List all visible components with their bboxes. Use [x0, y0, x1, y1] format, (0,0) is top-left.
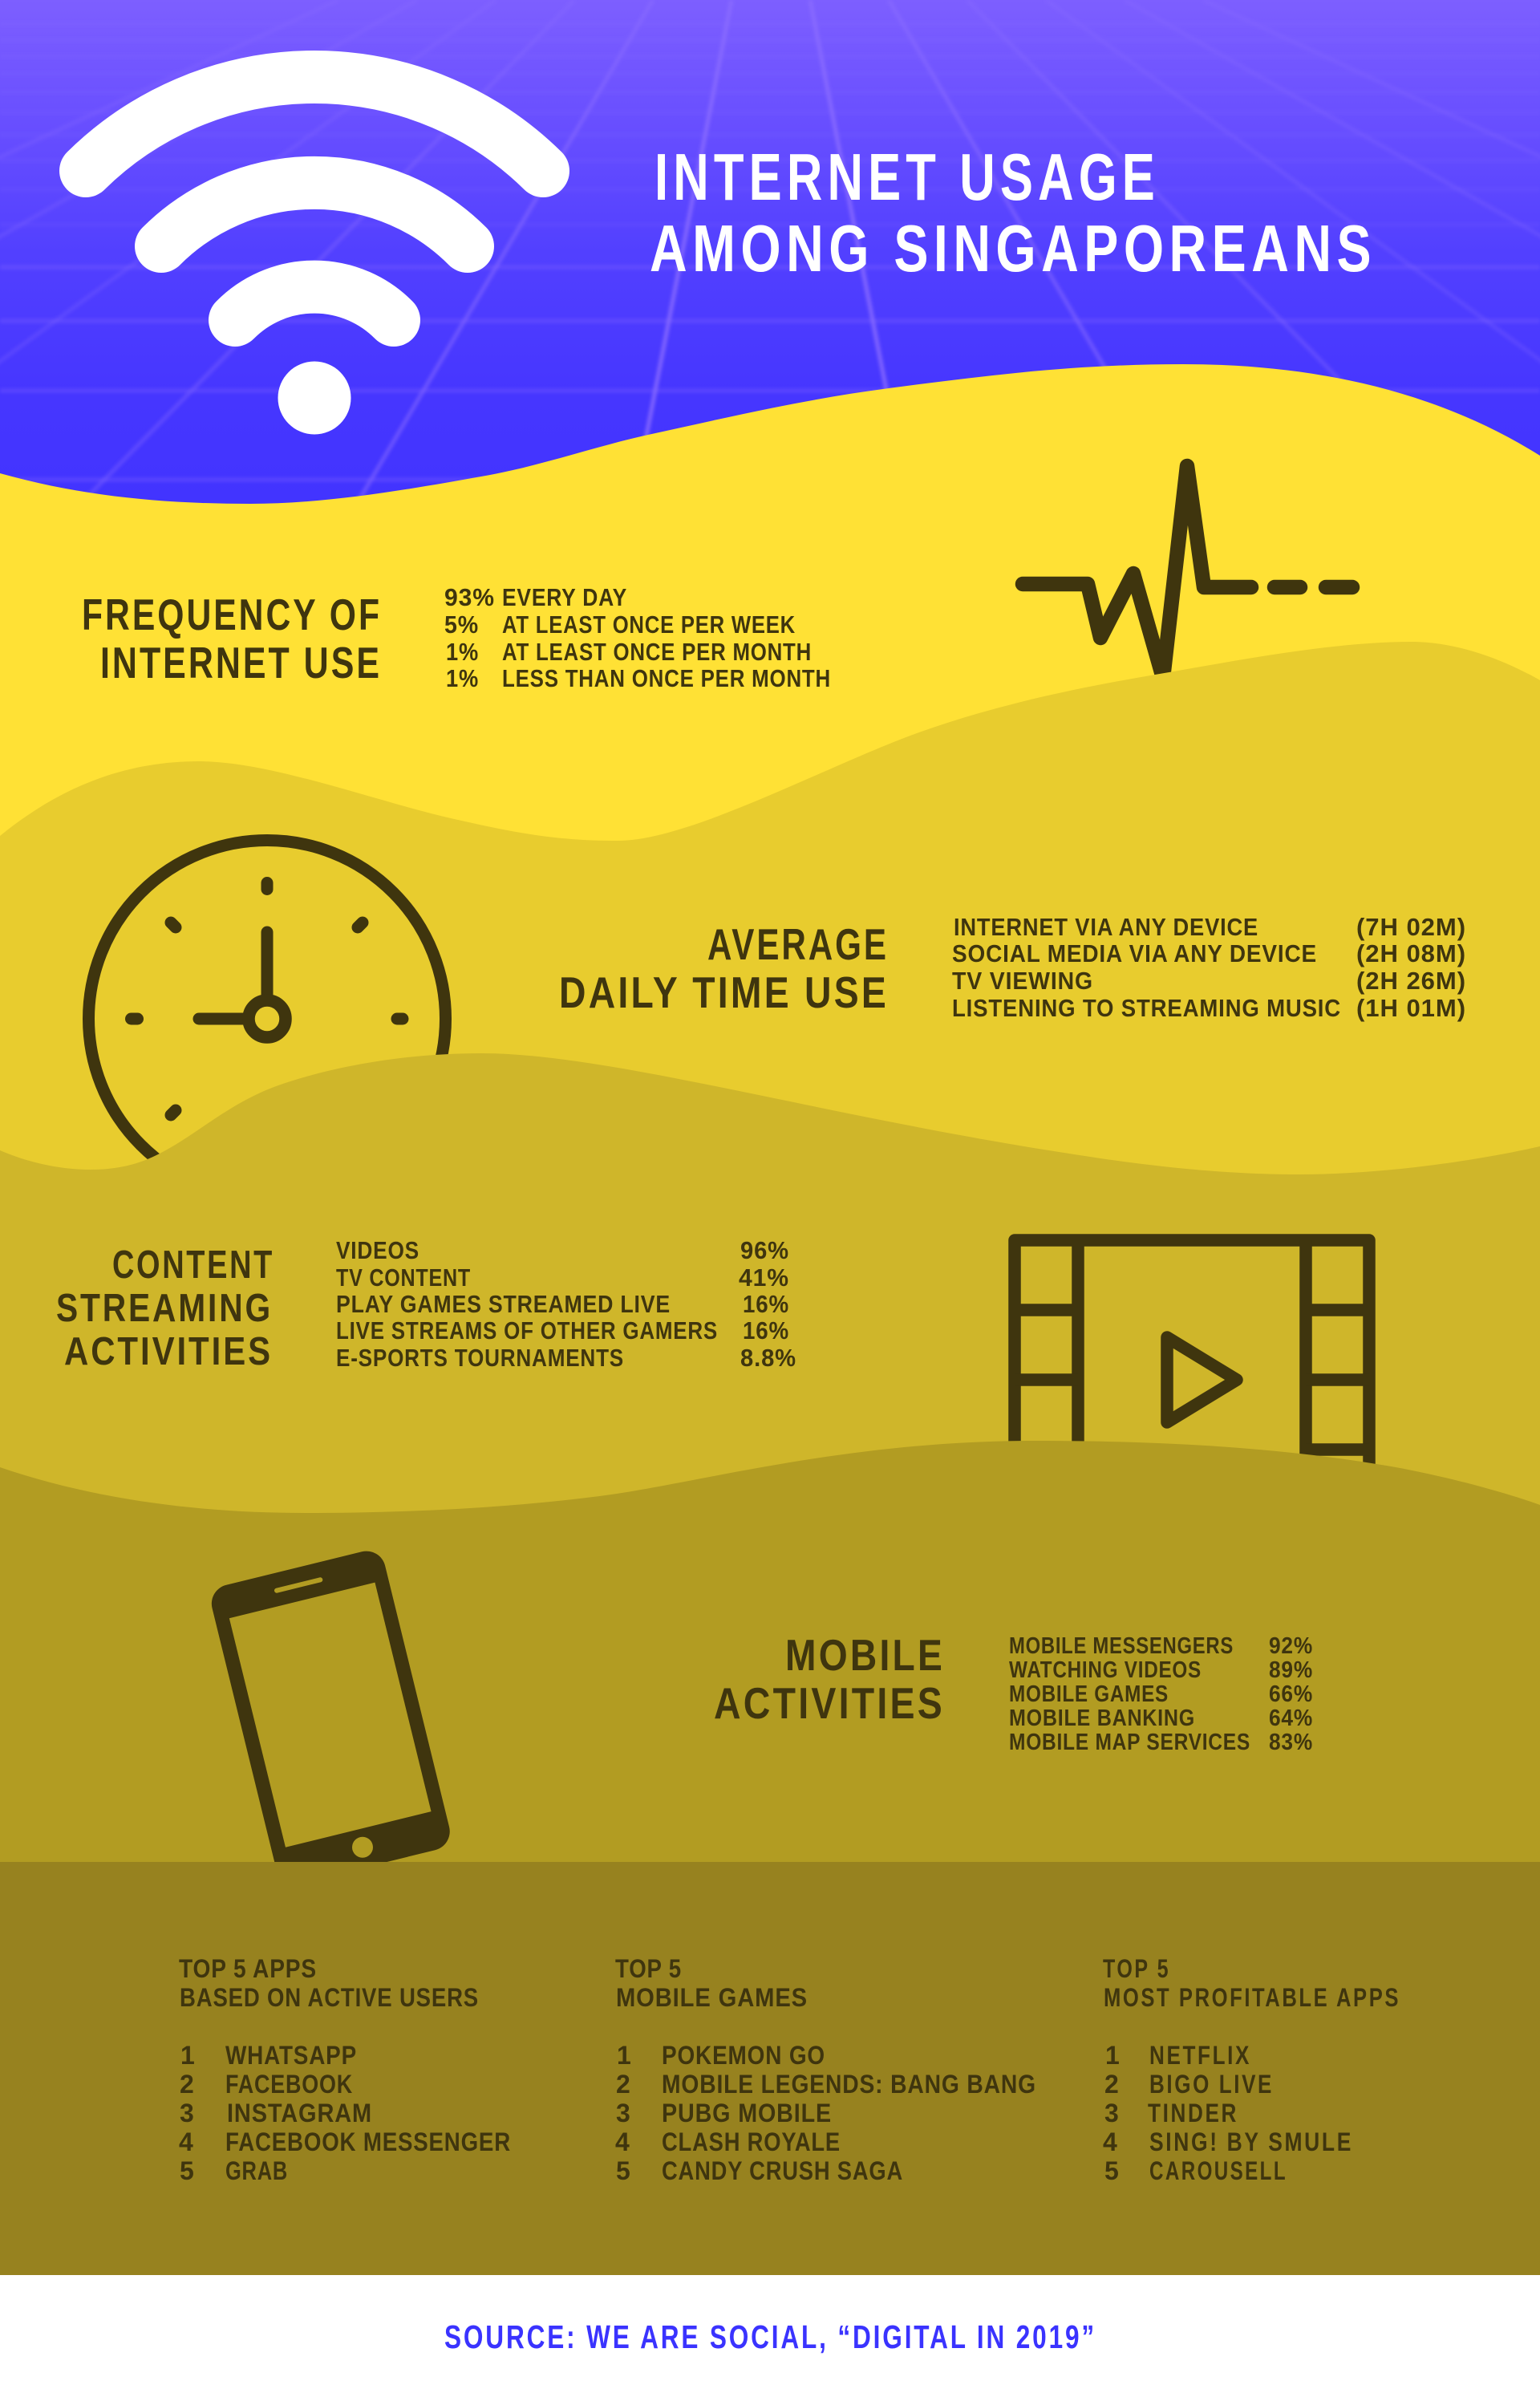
list: mobile activities: WATCHING VIDEOS	[1009, 1657, 1202, 1683]
list: top 5 apps based on active users	[179, 1954, 511, 2185]
list: content streaming activities: 96%	[740, 1236, 789, 1264]
title	[650, 140, 1376, 286]
panel: top 5 lists band	[0, 1862, 1540, 2275]
list: frequency of internet use	[444, 583, 831, 692]
list: content streaming activities: VIDEOS	[336, 1236, 419, 1264]
list: mobile activities	[1009, 1633, 1313, 1755]
list: mobile activities: 89%	[1269, 1657, 1313, 1683]
list: top 5 most profitable apps: 4	[1103, 2127, 1118, 2156]
list: top 5 apps based on active users: 5	[180, 2156, 195, 2185]
list: content streaming activities: TV CONTENT	[336, 1263, 471, 1292]
list: top 5 mobile games: 1	[617, 2041, 632, 2070]
list: average daily time use: SOCIAL MEDIA VIA ANY DEVICE	[952, 939, 1317, 967]
wave: mobile activities section background	[0, 1441, 1540, 1869]
list: top 5 mobile games	[615, 1954, 1036, 2185]
list: top 5 mobile games: MOBILE GAMES	[616, 1983, 808, 2012]
heading: mobile activities: MOBILE	[785, 1630, 945, 1680]
list: top 5 most profitable apps	[1103, 1954, 1400, 2185]
wave: daily time section background	[0, 642, 1540, 1203]
list: top 5 apps based on active users: FACEBOOK MESSENGER	[225, 2127, 511, 2156]
list: mobile activities: 64%	[1269, 1705, 1313, 1731]
heading: content streaming activities: ACTIVITIES	[64, 1330, 273, 1373]
heading: frequency of internet use: FREQUENCY OF	[82, 590, 382, 639]
list: top 5 most profitable apps: TOP 5	[1103, 1954, 1170, 1983]
list: top 5 mobile games: 2	[616, 2070, 631, 2099]
list: frequency of internet use: AT LEAST ONCE PER MONTH	[502, 638, 812, 666]
heading: average daily time use	[559, 919, 889, 1017]
list: mobile activities: MOBILE BANKING	[1009, 1705, 1195, 1731]
list: top 5 most profitable apps: 3	[1104, 2099, 1120, 2127]
list: top 5 mobile games: POKEMON GO	[662, 2041, 825, 2070]
icon: heartbeat pulse	[1023, 466, 1352, 678]
wave: yellow section background	[0, 364, 1540, 882]
heading: average daily time use: AVERAGE	[707, 919, 889, 969]
list: top 5 most profitable apps: TINDER	[1148, 2099, 1238, 2127]
list: top 5 most profitable apps: MOST PROFITABLE APPS	[1104, 1983, 1400, 2012]
heading: frequency of internet use	[82, 590, 382, 687]
list: average daily time use: INTERNET VIA ANY DEVICE	[954, 913, 1258, 941]
list: top 5 most profitable apps: 1	[1105, 2041, 1121, 2070]
list: top 5 most profitable apps: SING! BY SMULE	[1149, 2127, 1353, 2156]
list: content streaming activities	[336, 1236, 796, 1372]
list: top 5 apps based on active users: INSTAGRAM	[227, 2099, 372, 2127]
list: top 5 mobile games: 4	[615, 2127, 630, 2156]
list: top 5 mobile games: TOP 5	[615, 1954, 682, 1983]
list: top 5 apps based on active users: 1	[180, 2041, 196, 2070]
list: average daily time use: (2H 26M)	[1356, 967, 1466, 995]
panel: source footer	[0, 2275, 1540, 2397]
list: mobile activities: MOBILE MESSENGERS	[1009, 1633, 1234, 1659]
list: top 5 mobile games: 3	[616, 2099, 631, 2127]
list: frequency of internet use: 93%	[444, 583, 495, 611]
list: top 5 apps based on active users: GRAB	[225, 2156, 288, 2185]
heading: frequency of internet use: INTERNET USE	[100, 638, 382, 687]
list: content streaming activities: PLAY GAMES STREAMED LIVE	[336, 1290, 671, 1318]
list: top 5 mobile games: 5	[616, 2156, 631, 2185]
list: content streaming activities: 16%	[743, 1290, 789, 1318]
list: content streaming activities: 41%	[739, 1263, 789, 1292]
icon: clock	[88, 841, 446, 1197]
list: top 5 apps based on active users: TOP 5 APPS	[179, 1954, 317, 1983]
list: top 5 most profitable apps: 2	[1104, 2070, 1120, 2099]
list: content streaming activities: LIVE STREAMS OF OTHER GAMERS	[336, 1316, 718, 1345]
list: mobile activities: 92%	[1269, 1633, 1313, 1659]
list: top 5 most profitable apps: CAROUSELL	[1149, 2156, 1287, 2185]
list: content streaming activities: 8.8%	[740, 1344, 796, 1372]
icon: film strip with play button	[1015, 1240, 1369, 1524]
list: average daily time use: (7H 02M)	[1356, 913, 1466, 941]
list: top 5 apps based on active users: 3	[180, 2099, 195, 2127]
list: top 5 most profitable apps: NETFLIX	[1149, 2041, 1251, 2070]
list: content streaming activities: 16%	[743, 1316, 789, 1345]
list: mobile activities: 83%	[1269, 1730, 1313, 1755]
list: top 5 mobile games: CANDY CRUSH SAGA	[662, 2156, 903, 2185]
heading: average daily time use: DAILY TIME USE	[559, 967, 889, 1017]
list: top 5 mobile games: PUBG MOBILE	[662, 2099, 832, 2127]
list: frequency of internet use: 1%	[446, 664, 479, 692]
list: top 5 mobile games: MOBILE LEGENDS: BANG BANG	[662, 2070, 1036, 2099]
icon: smartphone	[208, 1547, 454, 1888]
list: content streaming activities: E-SPORTS TOURNAMENTS	[336, 1344, 624, 1372]
list: frequency of internet use: EVERY DAY	[502, 583, 627, 611]
heading: mobile activities	[714, 1630, 945, 1728]
list: top 5 mobile games: CLASH ROYALE	[662, 2127, 841, 2156]
list: top 5 most profitable apps: BIGO LIVE	[1149, 2070, 1274, 2099]
list: top 5 most profitable apps: 5	[1104, 2156, 1120, 2185]
heading: content streaming activities: STREAMING	[56, 1287, 273, 1330]
list: top 5 apps based on active users: BASED ON ACTIVE USERS	[180, 1983, 479, 2012]
header background with perspective grid	[0, 0, 1540, 562]
heading: content streaming activities	[56, 1243, 274, 1373]
heading: mobile activities: ACTIVITIES	[714, 1678, 945, 1728]
list: average daily time use: LISTENING TO STREAMING MUSIC	[952, 994, 1341, 1022]
list: frequency of internet use: 5%	[444, 610, 479, 639]
list: average daily time use: (2H 08M)	[1356, 939, 1466, 967]
list: top 5 apps based on active users: WHATSAPP	[225, 2041, 357, 2070]
icon: wifi	[86, 77, 543, 434]
list: frequency of internet use: LESS THAN ONCE PER MONTH	[502, 664, 831, 692]
list: average daily time use	[952, 913, 1466, 1022]
heading: content streaming activities: CONTENT	[112, 1243, 274, 1287]
list: average daily time use: TV VIEWING	[952, 967, 1093, 995]
list: mobile activities: MOBILE GAMES	[1009, 1681, 1169, 1707]
list: frequency of internet use: AT LEAST ONCE PER WEEK	[502, 610, 796, 639]
title: INTERNET USAGE	[654, 140, 1160, 214]
list: average daily time use: (1H 01M)	[1356, 994, 1466, 1022]
wave: content streaming section background	[0, 1053, 1540, 1564]
panel: source footer: SOURCE: WE ARE SOCIAL, “DIGITAL IN 2019”	[444, 2318, 1096, 2355]
list: top 5 apps based on active users: FACEBOOK	[225, 2070, 353, 2099]
list: top 5 apps based on active users: 4	[179, 2127, 194, 2156]
list: mobile activities: 66%	[1269, 1681, 1313, 1707]
list: mobile activities: MOBILE MAP SERVICES	[1009, 1730, 1250, 1755]
list: top 5 apps based on active users: 2	[180, 2070, 195, 2099]
list: frequency of internet use: 1%	[446, 638, 479, 666]
